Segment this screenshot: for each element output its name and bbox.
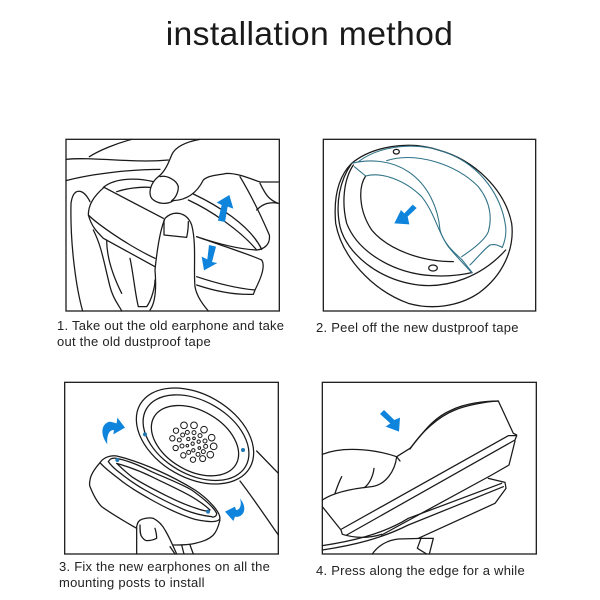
step 3 line art: earcup and pad (89, 368, 278, 554)
arrow: up (217, 195, 233, 222)
caption: step 3 (59, 559, 270, 590)
title: installation method (166, 15, 453, 53)
mounting post dots (115, 432, 245, 514)
caption: step 1: 1. Take out the old earphone and take (57, 318, 284, 333)
caption: step 2: 2. Peel off the new dustproof tape (316, 320, 519, 335)
caption: step 4: 4. Press along the edge for a while (316, 563, 525, 578)
arrow: peel direction (394, 205, 417, 224)
arrow: curved left (102, 418, 125, 444)
arrow: press direction (380, 410, 400, 432)
step 2 tape outline (352, 146, 506, 273)
step 2 line art: earpad rings (335, 145, 512, 307)
panel: step 1 remove old earpad (66, 139, 279, 311)
arrow: curved right (225, 498, 244, 521)
caption: step 1: out the old dustproof tape (57, 334, 211, 349)
arrow: down (202, 245, 217, 270)
caption: step 3: mounting posts to install (59, 575, 205, 590)
caption: step 3: 3. Fix the new earphones on all the (59, 559, 270, 574)
panel: step 4 press edge (322, 382, 536, 554)
panel: step 3 fix earphones (65, 368, 278, 554)
caption: step 1 (57, 318, 284, 349)
panel: step 2 peel tape (323, 139, 536, 311)
icon: speaker holes (170, 422, 217, 462)
step 4 line art: pressed earpad (322, 401, 517, 554)
step 1 line art: hands and earpad (66, 139, 278, 311)
